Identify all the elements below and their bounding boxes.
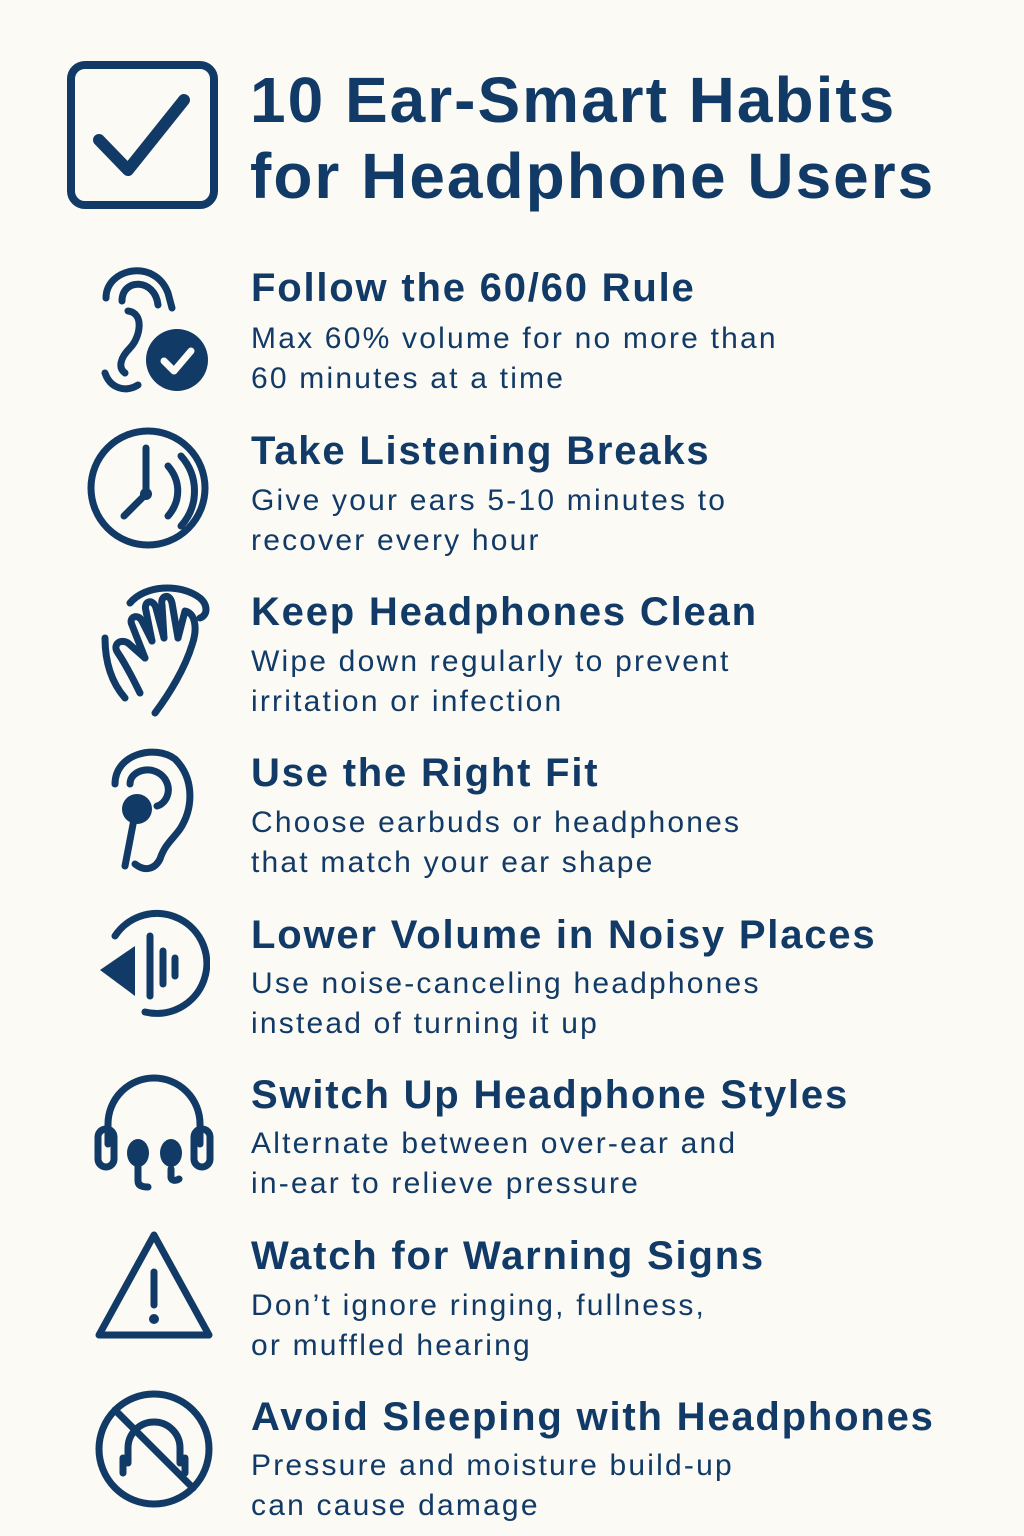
icon: checkbox [67, 61, 218, 209]
title [250, 64, 935, 212]
heading: Keep Headphones Clean [251, 590, 758, 634]
icon: clock [88, 428, 208, 548]
heading: Avoid Sleeping with Headphones [251, 1395, 935, 1439]
item 6 [94, 1073, 849, 1200]
icon: headphones [94, 1074, 214, 1190]
text [251, 1449, 734, 1522]
icon: warning [96, 1232, 212, 1338]
icon: volume [100, 910, 210, 1017]
text: 60 minutes at a time [251, 362, 565, 395]
text: Use noise-canceling headphones [251, 967, 761, 1000]
text: in-ear to relieve pressure [251, 1167, 640, 1200]
heading: Take Listening Breaks [251, 429, 710, 473]
text [251, 806, 741, 879]
item 3 [102, 584, 758, 718]
text: Pressure and moisture build-up [251, 1449, 734, 1482]
text: irritation or infection [251, 685, 563, 718]
item 8 [96, 1390, 935, 1522]
text: that match your ear shape [251, 846, 655, 879]
text: can cause damage [251, 1489, 540, 1522]
heading: Switch Up Headphone Styles [251, 1073, 849, 1117]
item 2 [88, 428, 727, 557]
item 4 [112, 748, 741, 879]
text [251, 1289, 706, 1362]
text: Max 60% volume for no more than [251, 322, 778, 355]
heading: Follow the 60/60 Rule [251, 266, 696, 310]
icon: ear with earbud [112, 748, 194, 872]
item 7 [96, 1232, 765, 1362]
icon: wiping hand [102, 584, 210, 716]
heading: Use the Right Fit [251, 751, 599, 795]
title: for Headphone Users [250, 140, 935, 212]
text [251, 967, 761, 1040]
text [251, 1127, 737, 1200]
item 1 [102, 266, 778, 395]
text: Don’t ignore ringing, fullness, [251, 1289, 706, 1322]
text [251, 322, 778, 395]
text: Alternate between over-ear and [251, 1127, 737, 1160]
text: Give your ears 5-10 minutes to [251, 484, 727, 517]
text: Wipe down regularly to prevent [251, 645, 731, 678]
heading: Lower Volume in Noisy Places [251, 913, 876, 957]
text: Choose earbuds or headphones [251, 806, 741, 839]
heading: Watch for Warning Signs [251, 1234, 765, 1278]
text [251, 645, 731, 718]
text: or muffled hearing [251, 1329, 532, 1362]
icon: no sleeping [96, 1390, 212, 1508]
text: recover every hour [251, 524, 541, 557]
item 5 [100, 910, 876, 1040]
title: 10 Ear-Smart Habits [250, 64, 896, 136]
text [251, 484, 727, 557]
text: instead of turning it up [251, 1007, 599, 1040]
icon: ear check [102, 267, 208, 392]
